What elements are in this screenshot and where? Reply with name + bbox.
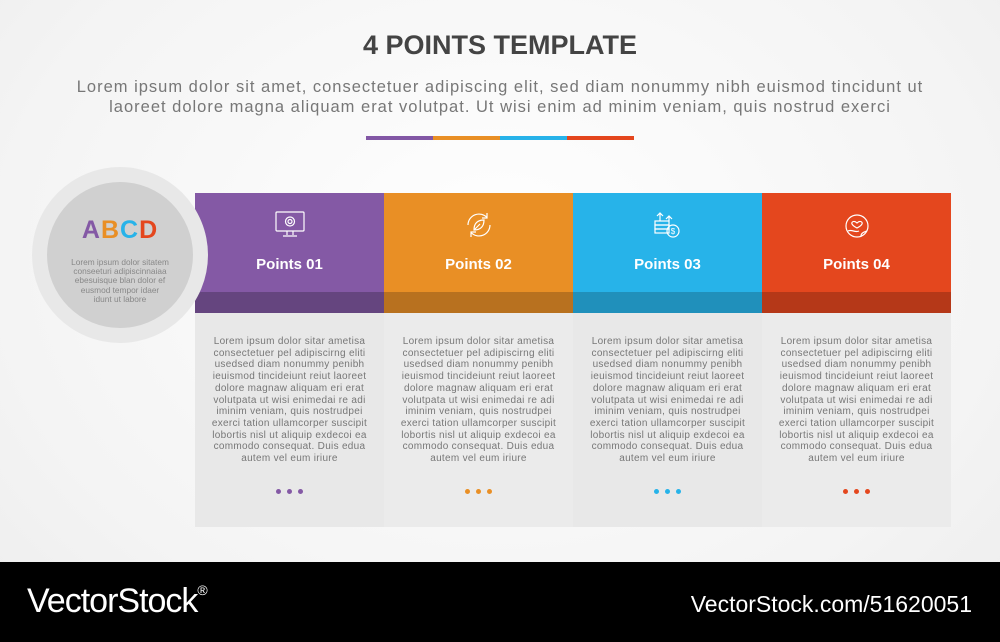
text: ieuismod tincideiunt reiut laoreet [591, 371, 744, 382]
icon: monitor gear [275, 211, 305, 237]
text: consectetuer pel adipiscirng eliti [592, 348, 743, 359]
dots [654, 489, 681, 494]
text: exerci tation ullamcorper suscipit [212, 418, 367, 429]
dots [276, 489, 303, 494]
text: volutpata ut wisi enimedai re adi [780, 395, 933, 406]
text: ieuismod tincideiunt reiut laoreet [402, 371, 555, 382]
text: volutpata ut wisi enimedai re adi [213, 395, 366, 406]
text: iminim veniam, quis nostrudpei [216, 406, 363, 417]
text: autem vel eum iriure [619, 453, 716, 464]
circle text [71, 257, 169, 304]
text: exerci tation ullamcorper suscipit [779, 418, 934, 429]
text: iminim veniam, quis nostrudpei [594, 406, 741, 417]
column 1 [195, 193, 384, 527]
text: exerci tation ullamcorper suscipit [590, 418, 745, 429]
dots [843, 489, 870, 494]
text: dolore magnaw aliquam eri erat [215, 383, 364, 394]
text: ieuismod tincideiunt reiut laoreet [213, 371, 366, 382]
text: autem vel eum iriure [808, 453, 905, 464]
column 3 [573, 193, 762, 527]
text: usedsed diam nonummy penibh [593, 359, 742, 370]
text: usedsed diam nonummy penibh [404, 359, 553, 370]
subtitle: laoreet dolore magna aliquam erat volutpat. Ut wisi enim ad minim veniam, quis nostrud exerci [109, 98, 891, 116]
text: commodo consequat. Duis edua [781, 441, 932, 452]
text: lobortis nisl ut aliquip exdecoi ea [212, 430, 367, 441]
circle: ABCD [32, 167, 208, 343]
text: usedsed diam nonummy penibh [782, 359, 931, 370]
text: commodo consequat. Duis edua [403, 441, 554, 452]
label: Points 02 [445, 256, 512, 273]
label: Points 03 [634, 256, 701, 273]
icon: coins up: $ [671, 227, 676, 236]
text: dolore magnaw aliquam eri erat [404, 383, 553, 394]
text: lobortis nisl ut aliquip exdecoi ea [590, 430, 745, 441]
footer bar [0, 562, 1000, 642]
circle text: Lorem ipsum dolor sitatem [71, 257, 169, 267]
text: lobortis nisl ut aliquip exdecoi ea [401, 430, 556, 441]
text: commodo consequat. Duis edua [592, 441, 743, 452]
label: Points 04 [823, 256, 890, 273]
text: usedsed diam nonummy penibh [215, 359, 364, 370]
text: Lorem ipsum dolor sitar ametisa [214, 336, 365, 347]
text: lobortis nisl ut aliquip exdecoi ea [779, 430, 934, 441]
text: Lorem ipsum dolor sitar ametisa [781, 336, 932, 347]
text: commodo consequat. Duis edua [214, 441, 365, 452]
text: autem vel eum iriure [241, 453, 338, 464]
text [590, 336, 745, 464]
subtitle [77, 78, 923, 116]
circle text: idunt ut labore [94, 294, 146, 304]
text: volutpata ut wisi enimedai re adi [402, 395, 555, 406]
ABCD heading: ABCD [82, 216, 158, 244]
subtitle: Lorem ipsum dolor sit amet, consectetuer adipiscing elit, sed diam nonummy nibh euismod tincidunt ut [77, 78, 923, 96]
circle text: eusmod tempor idaer [81, 285, 159, 295]
brand: VectorStock® [27, 582, 207, 620]
text: iminim veniam, quis nostrudpei [405, 406, 552, 417]
title: 4 POINTS TEMPLATE [363, 30, 637, 60]
column 2 [384, 193, 573, 527]
dots [465, 489, 492, 494]
text: exerci tation ullamcorper suscipit [401, 418, 556, 429]
text: volutpata ut wisi enimedai re adi [591, 395, 744, 406]
text: iminim veniam, quis nostrudpei [783, 406, 930, 417]
text: consectetuer pel adipiscirng eliti [214, 348, 365, 359]
text: Lorem ipsum dolor sitar ametisa [403, 336, 554, 347]
circle text: conseeturi adipiscinnaiaa [73, 266, 167, 276]
text [212, 336, 367, 464]
icon: globe heart [845, 214, 869, 238]
text: consectetuer pel adipiscirng eliti [403, 348, 554, 359]
icon: coins up [654, 212, 680, 238]
text: dolore magnaw aliquam eri erat [782, 383, 931, 394]
text: Lorem ipsum dolor sitar ametisa [592, 336, 743, 347]
url: VectorStock.com/51620051 [691, 591, 972, 617]
text: autem vel eum iriure [430, 453, 527, 464]
color divider [366, 136, 634, 140]
text: dolore magnaw aliquam eri erat [593, 383, 742, 394]
circle text: ebesuisque blan dolor ef [75, 275, 165, 285]
text [401, 336, 556, 464]
icon: cycle leaf [467, 213, 491, 237]
text: consectetuer pel adipiscirng eliti [781, 348, 932, 359]
text: ieuismod tincideiunt reiut laoreet [780, 371, 933, 382]
text [779, 336, 934, 464]
label: Points 01 [256, 256, 323, 273]
column 4 [762, 193, 951, 527]
